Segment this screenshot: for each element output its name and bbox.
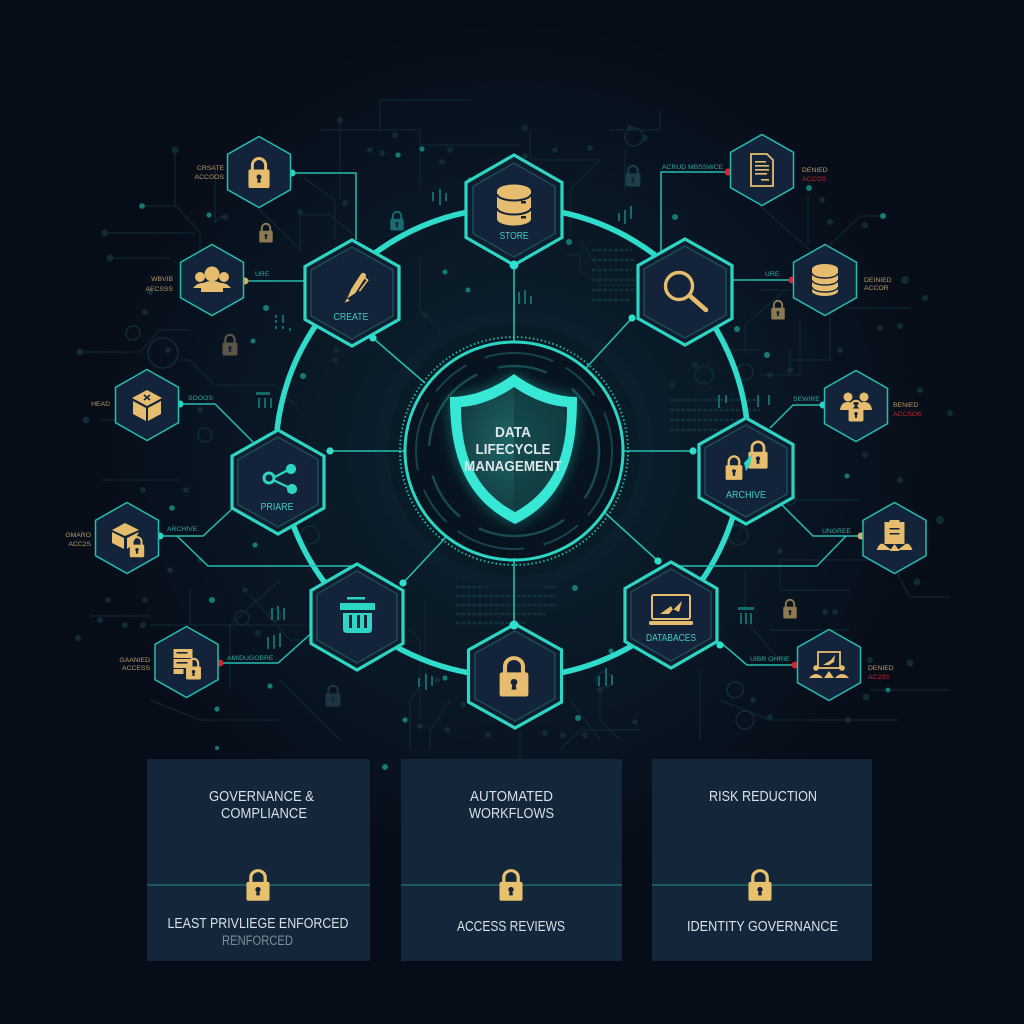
stage: create <box>305 240 399 346</box>
connector: lock hex to create <box>288 170 356 240</box>
gold access labels, left: CRSATE <box>197 165 224 172</box>
panel: risk reduction <box>652 759 872 961</box>
stage: archive <box>699 418 793 524</box>
panel heading: RISK REDUCTION <box>709 788 817 805</box>
gold access labels, left: WBVIB <box>151 276 173 283</box>
connector: people hex to create <box>242 278 306 284</box>
panel caption <box>168 915 349 948</box>
teal connector labels: SEWIRE <box>793 396 820 403</box>
stage: store: STORE <box>500 230 528 242</box>
panel: automated workflows <box>401 759 622 961</box>
circuit board background traces <box>80 100 950 760</box>
teal connector labels: SOOOS <box>188 395 213 402</box>
icon: panel lock <box>748 871 772 901</box>
access node: lock <box>228 136 290 208</box>
stage: store <box>466 155 562 265</box>
dim background circuit nodes <box>75 117 953 738</box>
access node: box <box>116 370 178 440</box>
icon: paired locks <box>726 442 768 480</box>
stage: share: PRIARE <box>260 501 294 513</box>
icon: database <box>497 184 531 226</box>
access node: people <box>180 244 244 316</box>
icon: laptop <box>649 595 693 625</box>
connector: box hex to share <box>176 400 253 442</box>
access node: people with lock <box>824 370 888 442</box>
teal connector labels: ARCHIVE <box>167 526 198 533</box>
icon: panel lock <box>499 871 523 901</box>
icon: pen <box>344 273 368 303</box>
panel caption: IDENTITY GOVERNANCE <box>687 918 838 935</box>
gold access labels, left: AECSSS <box>145 286 173 293</box>
icon: dim background locks <box>223 166 797 707</box>
title text: LIFECYCLE <box>476 442 551 458</box>
stage: databases <box>625 562 717 668</box>
central backdrop rings <box>374 310 654 590</box>
title text: MANAGEMENT <box>464 459 562 475</box>
access node: box with lock <box>96 502 158 574</box>
panel heading <box>209 788 314 822</box>
stage: create: CREATE <box>334 311 368 323</box>
access node: clipboard with people <box>863 502 926 574</box>
panel heading: WORKFLOWS <box>469 805 554 822</box>
gold and red access labels, right: AC23S <box>868 674 890 681</box>
panel heading: GOVERNANCE & <box>209 788 314 805</box>
teal connector labels <box>167 164 852 663</box>
gold and red access labels, right: ACCOS <box>802 176 827 183</box>
gold access labels, left: GMARO <box>65 532 91 539</box>
panel heading: COMPLIANCE <box>221 805 307 822</box>
access node: files with lock <box>155 626 218 698</box>
icon: panel lock <box>246 871 270 901</box>
stage: databases: DATABACES <box>646 632 696 644</box>
title text <box>464 425 562 475</box>
stage: share <box>232 430 324 534</box>
panel heading: AUTOMATED <box>470 788 553 805</box>
access node: laptop with people <box>798 630 860 700</box>
gold access labels, left: ACC2S <box>68 541 91 548</box>
stage: search <box>638 239 732 345</box>
icon: share nodes <box>264 465 296 493</box>
gold and red access labels, right: ACCSOS <box>893 411 922 418</box>
teal connector labels: URE <box>765 271 780 278</box>
spokes from centre to lifecycle stages <box>330 264 693 625</box>
gold and red access labels, right: DENIED <box>868 665 894 672</box>
icon: trash can <box>340 597 375 633</box>
gold and red access labels, right <box>802 167 922 681</box>
connector: files hex to trash <box>216 630 315 666</box>
gold access labels, left: HEAD <box>91 401 110 408</box>
connector: people-lock hex to archive <box>770 402 826 428</box>
spoke end nodes <box>326 260 724 649</box>
teal connector labels: ACRUD MBSSWCE <box>662 164 724 171</box>
gold and red access labels, right: ACCOR <box>864 285 889 292</box>
decorative data glyph columns <box>256 189 770 690</box>
panel heading <box>469 788 554 822</box>
shield with title <box>450 374 577 524</box>
stage: archive: ARCHIVE <box>726 489 766 501</box>
access node: database <box>794 244 856 316</box>
connector: document hex to search <box>661 168 732 252</box>
gold and red access labels, right: DEINIED <box>864 277 892 284</box>
icon: padlock <box>500 658 528 697</box>
gold access labels, left <box>65 165 224 672</box>
gold and red access labels, right: BENIED <box>893 402 918 409</box>
background glow <box>84 20 944 880</box>
connector: laptop hex to databases <box>720 642 798 668</box>
teal highlight nodes <box>139 146 890 770</box>
icon: magnifier <box>666 272 706 310</box>
gold access labels, left: GAANIED <box>119 657 150 664</box>
panel caption: LEAST PRIVLIEGE ENFORCED <box>168 915 349 932</box>
teal connector labels: UNGREE <box>822 528 852 535</box>
gold and red access labels, right: DENIED <box>802 167 828 174</box>
access node: document <box>730 134 794 206</box>
connector: box-lock hex to share and trash <box>156 509 357 566</box>
gold access labels, left: ACCOOS <box>195 174 224 181</box>
teal connector labels: UIBR OHRIE <box>750 656 790 663</box>
panel caption: ACCESS REVIEWS <box>457 918 565 935</box>
teal connector labels: URE <box>255 271 270 278</box>
lifecycle ring arcs <box>277 212 747 673</box>
teal connector labels: AMIDUGOBRE <box>227 655 274 662</box>
centre ring <box>400 337 628 565</box>
connector: database hex to search <box>731 276 796 284</box>
stage: delete <box>311 564 403 670</box>
decorative circuit rings <box>126 128 795 729</box>
connector: clipboard hex to archive and databases <box>670 503 864 566</box>
gold access labels, left: ACCESS <box>122 665 150 672</box>
panel caption: RENFORCED <box>222 933 293 948</box>
title text: DATA <box>495 425 531 441</box>
panel: governance and compliance <box>147 759 370 961</box>
stage: lock <box>468 624 562 728</box>
decorative code blocks <box>456 250 760 623</box>
